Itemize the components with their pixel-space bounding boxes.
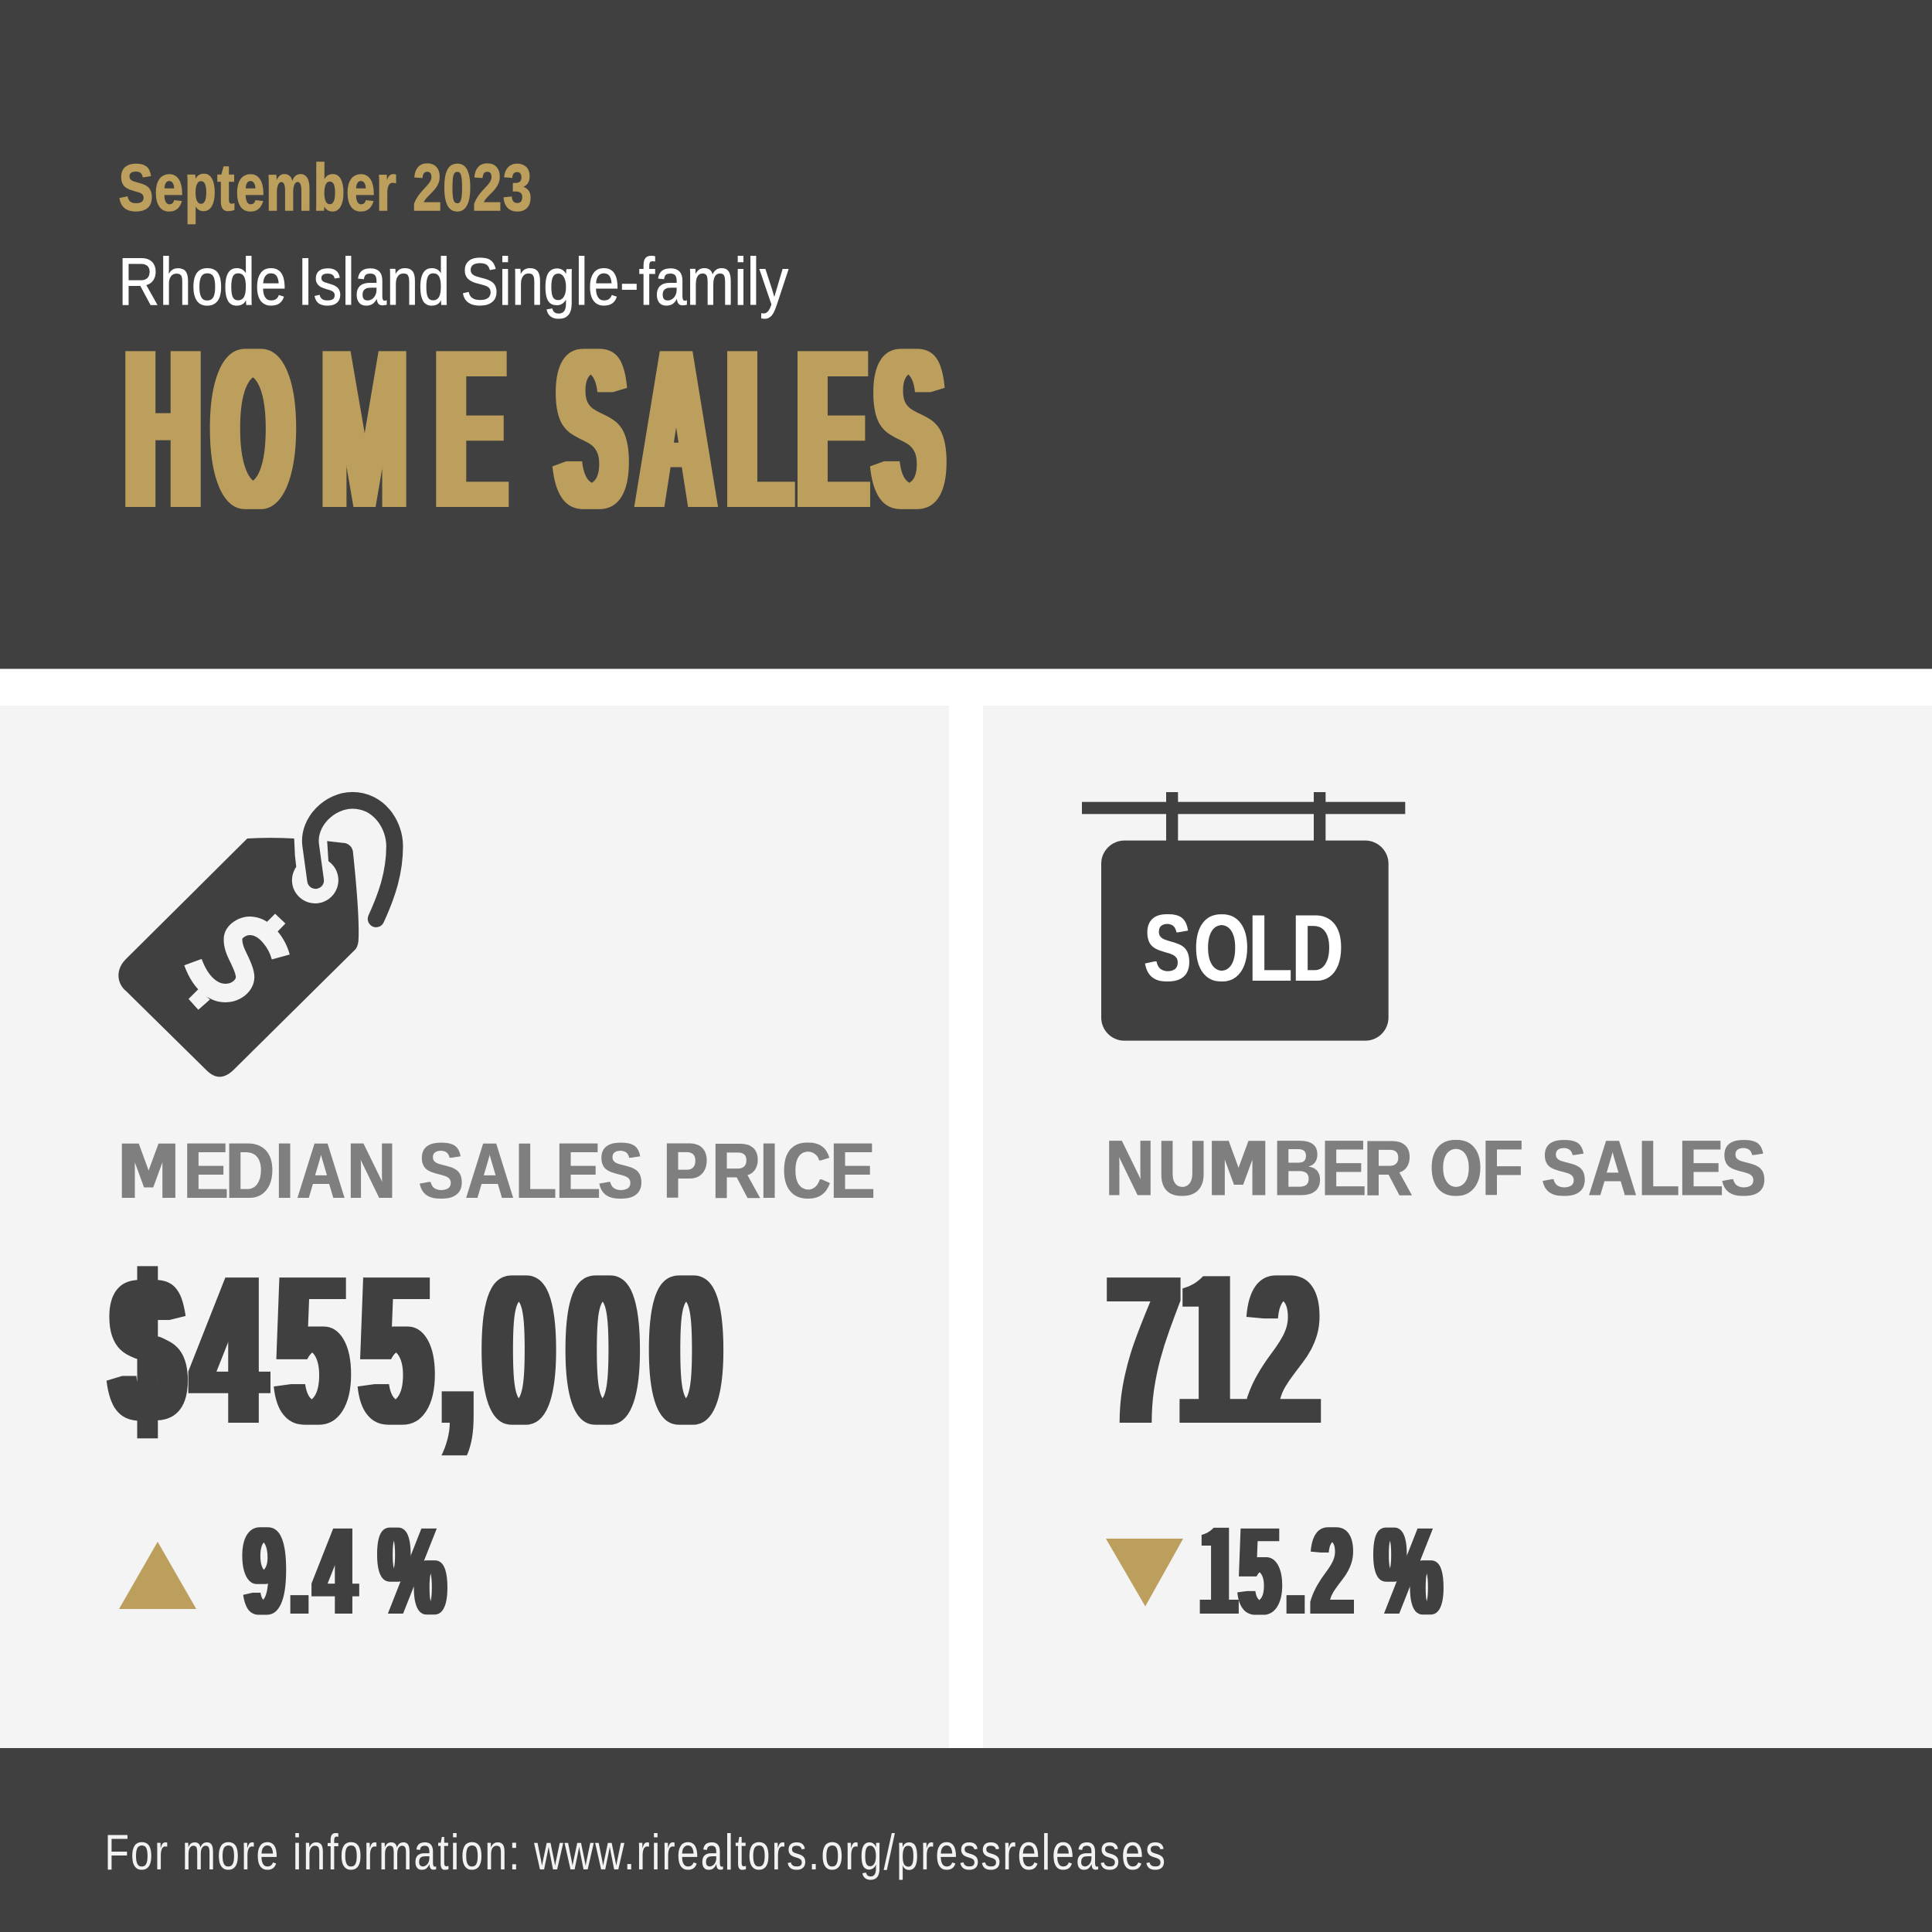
panel background	[983, 706, 1932, 1748]
sign text: SOLD	[1144, 896, 1343, 1002]
percent change: 15.2%	[1198, 1479, 1441, 1648]
footer background	[0, 1748, 1932, 1932]
sign posts	[1166, 792, 1178, 842]
panel: median sales price	[0, 706, 949, 1748]
subtitle: Rhode Island Single-family	[118, 245, 788, 319]
arrow: up triangle	[119, 1542, 196, 1609]
footer link text: For more information: www.rirealtors.org/pressreleases	[104, 1825, 1165, 1880]
header background	[0, 0, 1932, 669]
icon: price tag	[118, 801, 395, 1077]
percent change: 9.4%	[243, 1502, 445, 1641]
dollar sign	[189, 913, 285, 1010]
tag body	[118, 838, 359, 1077]
panel background	[0, 706, 949, 1748]
icon: sold sign	[1082, 792, 1405, 1041]
main title: HOME SALES	[126, 303, 943, 556]
sign board	[1101, 841, 1389, 1041]
metric label: NUMBER OF SALES	[1105, 1124, 1766, 1213]
metric value: 712	[1108, 1193, 1319, 1480]
panel: number of sales	[983, 706, 1932, 1748]
panel: header	[0, 0, 1932, 669]
sign bar	[1082, 802, 1405, 814]
date heading: September 2023	[118, 151, 532, 225]
panel: footer	[0, 1748, 1932, 1932]
tag string	[311, 801, 395, 919]
metric value: $455,000	[112, 1232, 722, 1468]
metric label: MEDIAN SALES PRICE	[117, 1128, 875, 1216]
arrow: down triangle	[1106, 1539, 1183, 1607]
